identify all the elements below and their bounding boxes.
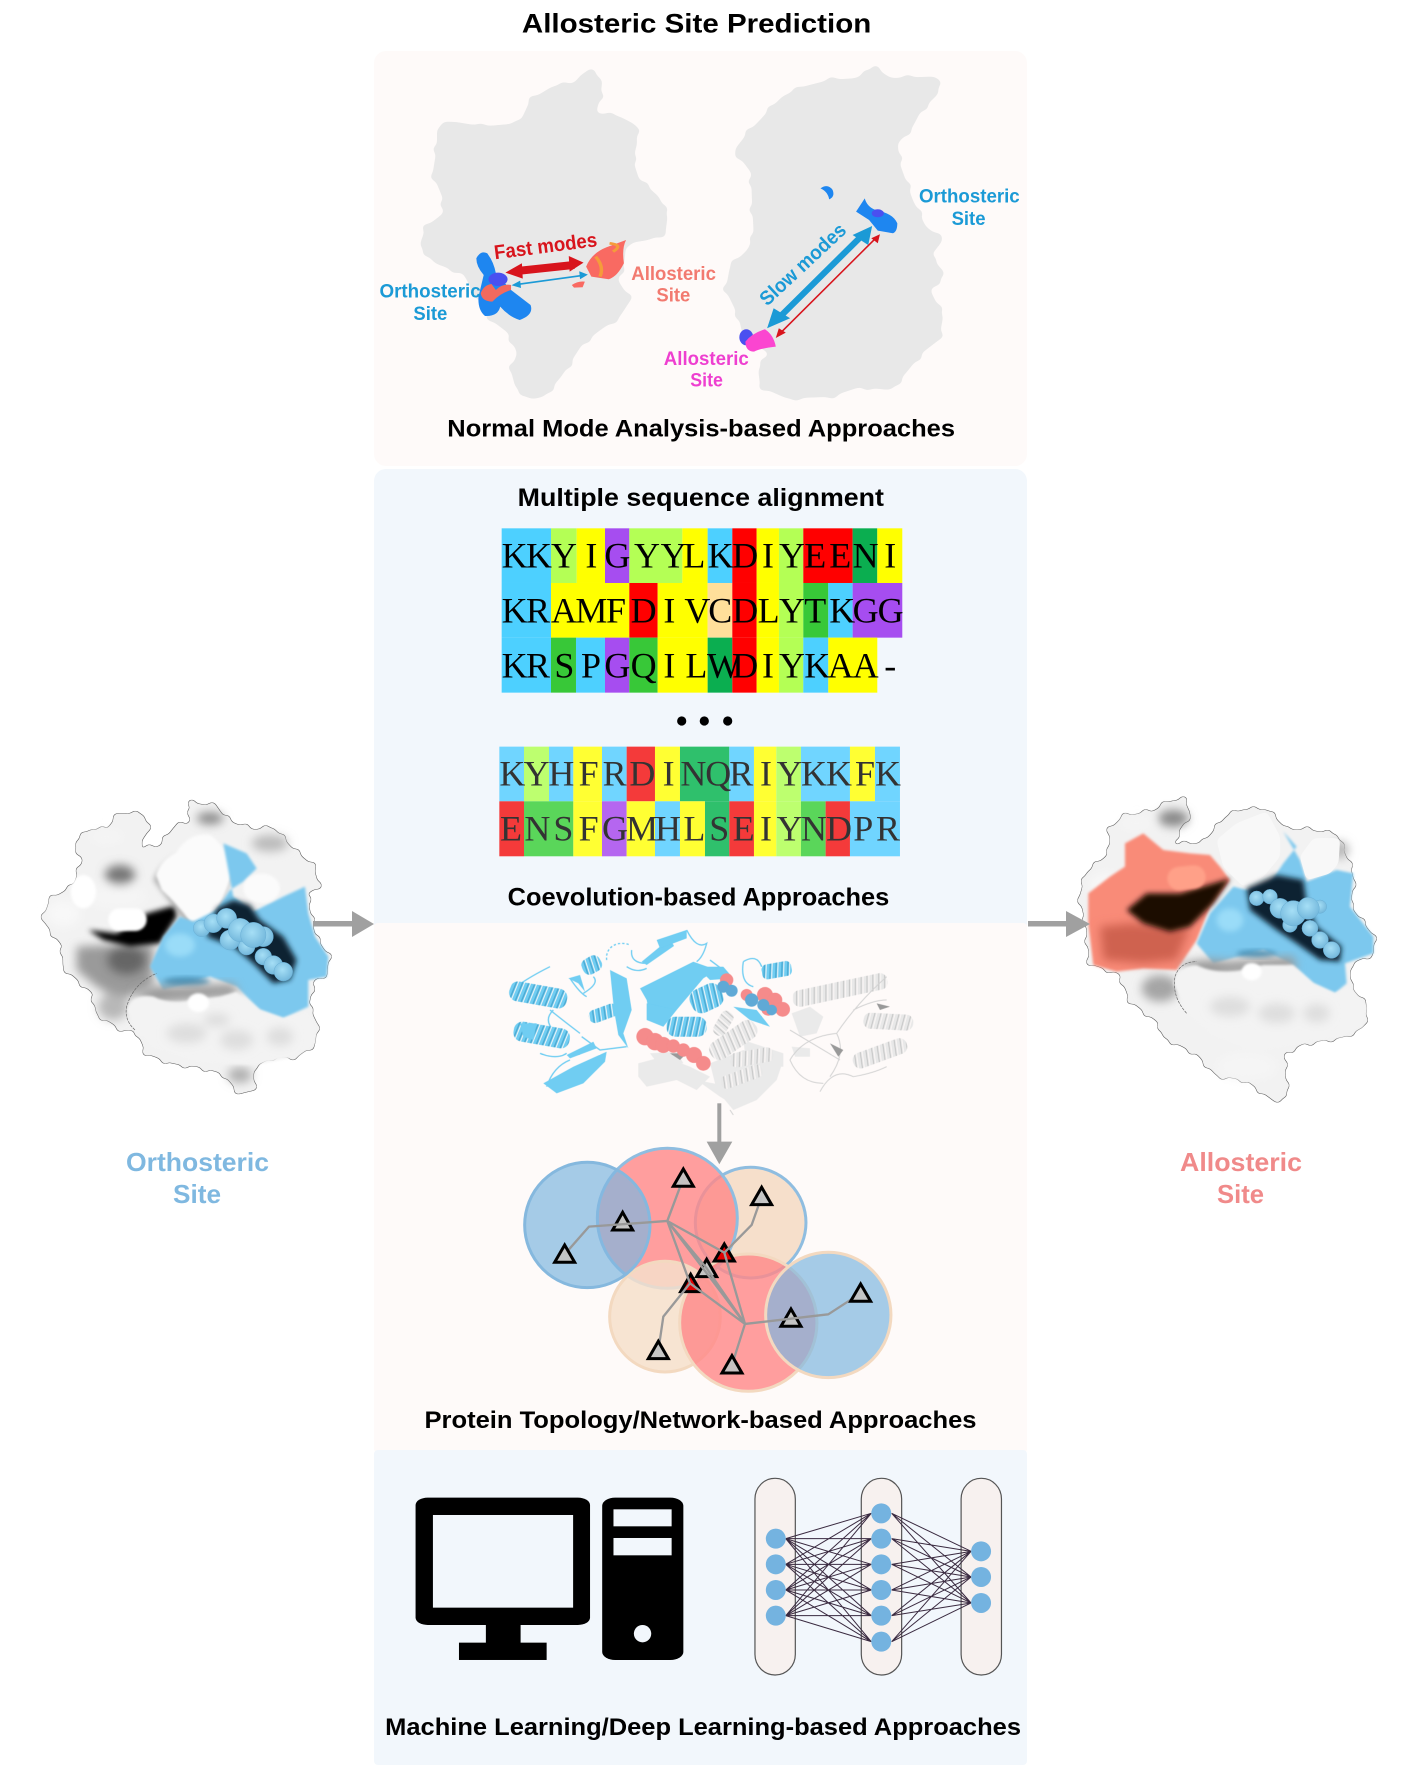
arrow: orthosteric to panels (313, 911, 374, 937)
network diagram (525, 1148, 891, 1391)
arrow: structure to network (707, 1103, 732, 1164)
label: orthosteric site left: Site (413, 304, 447, 325)
heading: coevolution: Coevolution-based Approaches (508, 884, 889, 912)
pocket shadows (1217, 875, 1342, 962)
loops: gray subunit (730, 977, 887, 1115)
arrow: panels to allosteric (1028, 911, 1090, 937)
ligand spheres (193, 908, 293, 981)
sheets: gray subunit (638, 1007, 823, 1110)
ligand spheres (1249, 889, 1340, 958)
label: allosteric site magenta: Site (690, 371, 723, 392)
orthosteric site blob: right (856, 198, 897, 233)
alignment block: top: KRAMFDIVCDLYTKGG (502, 590, 904, 630)
protein silhouette: fast modes (420, 72, 667, 399)
label: allosteric site: Site (1217, 1179, 1264, 1209)
label: allosteric site (1180, 1147, 1302, 1209)
inner purple patch (872, 209, 884, 217)
inner outline: lower surface (126, 973, 157, 1030)
mottled shading on lower surface (167, 1013, 293, 1050)
helices: blue subunit (508, 953, 793, 1050)
triangles on edges (555, 1169, 871, 1373)
protein surface: allosteric (1080, 800, 1373, 1100)
protein surface: orthosteric (43, 803, 328, 1093)
pocket shadows (163, 900, 297, 986)
arrow: fast modes red (505, 256, 584, 279)
white bump: pill (108, 908, 147, 931)
label: orthosteric site: Orthosteric (126, 1147, 269, 1177)
network nodes (766, 1503, 991, 1652)
allosteric site blob: left (586, 240, 626, 279)
lower surface shadow (1180, 957, 1297, 977)
label: orthosteric site left (380, 282, 481, 325)
allosteric lower shading (1100, 923, 1190, 963)
allosteric blob: magenta (745, 329, 776, 352)
label: orthosteric site right (919, 187, 1020, 230)
label: orthosteric site: Site (173, 1179, 221, 1209)
label: orthosteric site right: Site (952, 209, 986, 230)
inner purple site (488, 273, 508, 286)
highlight on lower surface (188, 993, 209, 1012)
mottled shading on lower surface (1210, 997, 1330, 1023)
label: allosteric site: Allosteric (1180, 1147, 1302, 1177)
title: Allosteric Site Prediction (522, 8, 871, 38)
label: fast modes: Fast modes (493, 229, 598, 264)
network layers (755, 1478, 1001, 1675)
orthosteric site surface (150, 843, 328, 1018)
label: allosteric site left: Site (656, 286, 690, 307)
lower surface shadow (133, 983, 240, 1003)
protein ribbon structure (508, 930, 914, 1115)
panel background: network (374, 923, 1027, 1453)
heading: multiple sequence alignment: Multiple sequence alignment (518, 484, 885, 512)
spheres: bound blue residues (717, 981, 777, 1015)
surface silhouette (43, 803, 328, 1093)
shadow: top center bump (153, 855, 233, 925)
diagram: fast and slow mode proteins (420, 68, 945, 399)
ellipsis dots (677, 716, 732, 726)
alignment block: top: KKYIGYYLKDIYEENI (502, 535, 896, 575)
surface silhouette (1080, 800, 1373, 1100)
panel: protein topology network (374, 923, 1027, 1453)
network edges (565, 1178, 861, 1365)
label: orthosteric site (126, 1147, 269, 1209)
heading: network: Protein Topology/Network-based Approaches (424, 1407, 976, 1434)
allosteric bump (1166, 864, 1207, 891)
inner outline: lower surface (1174, 962, 1197, 1013)
protein silhouette: slow modes (726, 68, 945, 398)
orange streaks (596, 243, 618, 277)
lower white surface (127, 992, 317, 1065)
white bump: top center (156, 835, 233, 922)
white bump: left (71, 875, 96, 908)
alignment block: top: KRSPGQILWDIYKAA- (502, 645, 896, 685)
panel: coevolution (374, 469, 1027, 935)
highlight on lower surface (1242, 963, 1262, 980)
neural network (755, 1478, 1001, 1675)
label: orthosteric site left: Orthosteric (380, 282, 481, 303)
label: allosteric site magenta (664, 349, 749, 392)
overlap red patch (481, 284, 511, 302)
arrow: fast modes thin blue (511, 271, 588, 288)
alignment block: bottom: ENSFGMHLSEIYNDPR (500, 809, 900, 849)
arrow: slow modes thin red (776, 234, 880, 338)
sheets: blue subunit (520, 930, 770, 1093)
alignment block: top (502, 528, 904, 693)
lower white surface (1173, 965, 1367, 1053)
small allosteric patch (572, 281, 585, 288)
label: orthosteric site right: Orthosteric (919, 187, 1020, 208)
deep pocket (88, 905, 177, 947)
white bump: top center (1217, 812, 1280, 887)
spheres: allosteric ligands (636, 973, 790, 1071)
community circles (525, 1148, 891, 1391)
orthosteric site surface (1197, 832, 1373, 993)
alignment block: bottom: KYHFRDINQRIYKKFK (499, 754, 901, 794)
heading: normal mode analysis: Normal Mode Analysis-based Approaches (447, 416, 955, 443)
panel: machine learning (374, 1450, 1027, 1765)
panel background: machine learning (374, 1450, 1027, 1765)
icon: computer monitor (416, 1498, 590, 1660)
label: allosteric site left (631, 264, 716, 307)
panel background: coevolution (374, 469, 1027, 935)
allosteric site: magenta (739, 329, 753, 345)
label: allosteric site magenta: Allosteric (664, 349, 749, 370)
label: slow modes: Slow modes (756, 219, 851, 310)
white bump: top right (1300, 838, 1340, 880)
orthosteric site blob: left (476, 252, 531, 320)
panel: normal mode analysis (374, 51, 1027, 466)
triangles behind edges (613, 1212, 801, 1326)
label: allosteric site left: Allosteric (631, 264, 716, 285)
loops: blue subunit (510, 930, 762, 1087)
heading: machine learning: Machine Learning/Deep Learning-based Approaches (385, 1714, 1021, 1741)
white bump: top right (243, 874, 280, 903)
surface shading (47, 812, 288, 1083)
orthosteric site blob: right small (820, 186, 833, 199)
panel background: normal mode (374, 51, 1027, 466)
allosteric site surface (1088, 833, 1230, 972)
icon: computer tower (602, 1498, 683, 1660)
network connections (786, 1513, 971, 1642)
alignment block: bottom (499, 747, 901, 856)
arrow: slow modes blue (767, 226, 872, 328)
dark fold: gray subunit (670, 1003, 890, 1060)
surface shading (1090, 810, 1349, 1080)
helices: gray subunit (706, 972, 914, 1090)
allosteric deep pocket (1127, 878, 1230, 932)
